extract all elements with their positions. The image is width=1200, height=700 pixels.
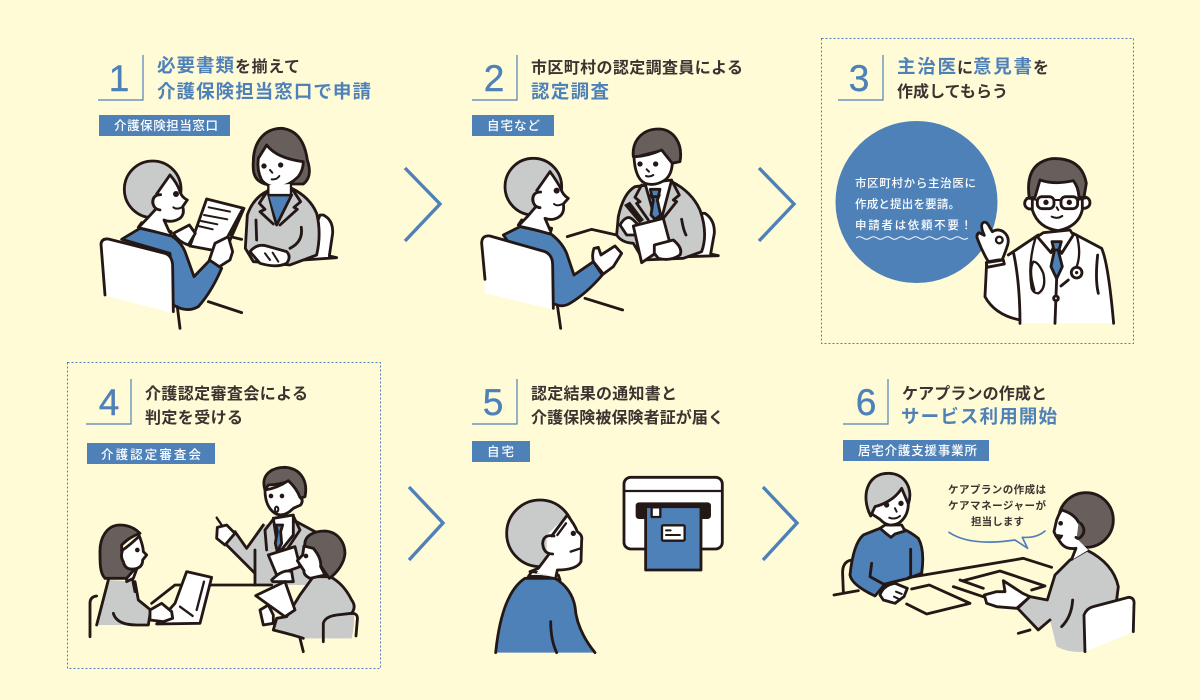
panel: step 2 (472, 55, 743, 328)
step 3 heading: に (957, 60, 973, 77)
step 5 number: 5 (483, 382, 503, 423)
callout circle: 作成と提出を要請。 (855, 197, 960, 211)
callout circle: 市区町村から主治医に (855, 176, 976, 190)
panel: step 5 (472, 379, 724, 653)
panel: step 3 (822, 38, 1134, 344)
step 5 heading (531, 384, 724, 427)
step 1 heading (157, 55, 371, 102)
arrow: step 4 to 5 (409, 487, 443, 560)
step 2 number: 2 (484, 58, 504, 99)
step 5 place label: 自宅 (487, 444, 514, 459)
panel: step 1 (98, 55, 371, 328)
illustration: care manager consultation (834, 473, 1134, 652)
step 6 heading: ケアプランの作成と (902, 384, 1047, 403)
step 4 place label: 介護認定審査会 (101, 447, 201, 462)
step 2 place label (472, 115, 554, 136)
step 6 heading (901, 384, 1057, 427)
step 4 heading (145, 385, 308, 427)
step 4 dashed frame (68, 362, 380, 668)
step 3 heading: 意見書 (973, 56, 1032, 77)
arrow: step 5 to 6 (763, 487, 797, 560)
step 4 number: 4 (99, 382, 119, 423)
step 3 heading: 主治医 (897, 56, 956, 77)
step 6 place label: 居宅介護支援事業所 (858, 443, 977, 458)
arrow: step 1 to 2 (405, 168, 440, 241)
step 5 heading: 認定結果の通知書と (531, 384, 677, 403)
step 2 heading (531, 58, 743, 102)
illustration: doctor (977, 159, 1114, 323)
illustration: home interview (482, 129, 718, 328)
step 1 heading: 介護保険担当窓口で申請 (157, 81, 371, 102)
step 1 place label: 介護保険担当窓口 (114, 118, 218, 133)
arrow: step 2 to 3 (759, 168, 794, 241)
step 4 heading: 介護認定審査会による (145, 385, 308, 403)
illustration: certification committee (90, 467, 357, 652)
speech bubble text: 担当します (971, 515, 1024, 528)
step 3 heading (897, 56, 1049, 101)
step 5 place label (472, 441, 530, 462)
step 6 heading: サービス利用開始 (901, 406, 1057, 427)
illustration: applicant and counter staff (101, 128, 337, 328)
step 4 heading: 判定を受ける (145, 408, 243, 427)
step 6 number: 6 (856, 382, 876, 423)
illustration: applicant looking at mailbox (496, 477, 722, 653)
step 6 place label (843, 440, 989, 461)
step 1 number: 1 (109, 58, 129, 99)
step 3 dashed frame (822, 38, 1134, 344)
panel: step 4 (68, 362, 380, 668)
step 1 place label (99, 115, 230, 136)
callout circle (836, 121, 998, 283)
step 1 heading: を揃えて (235, 57, 300, 76)
speech bubble text (948, 483, 1046, 528)
step 1 heading: 必要書類 (157, 55, 234, 76)
step 3 heading: 作成してもらう (897, 82, 1008, 101)
speech bubble text: ケアマネージャーが (948, 499, 1046, 512)
panel: step 6 (834, 379, 1134, 652)
step 2 place label: 自宅など (487, 118, 540, 133)
speech bubble text: ケアプランの作成は (948, 483, 1046, 496)
step 4 place label (87, 443, 215, 464)
step 2 heading: 認定調査 (531, 81, 609, 102)
step 3 number: 3 (849, 58, 869, 99)
step 3 heading: を (1033, 59, 1049, 77)
callout circle: 申請者は依頼不要！ (855, 218, 972, 232)
step 5 heading: 介護保険被保険者証が届く (531, 408, 724, 427)
step 2 heading: 市区町村の認定調査員による (531, 58, 743, 77)
